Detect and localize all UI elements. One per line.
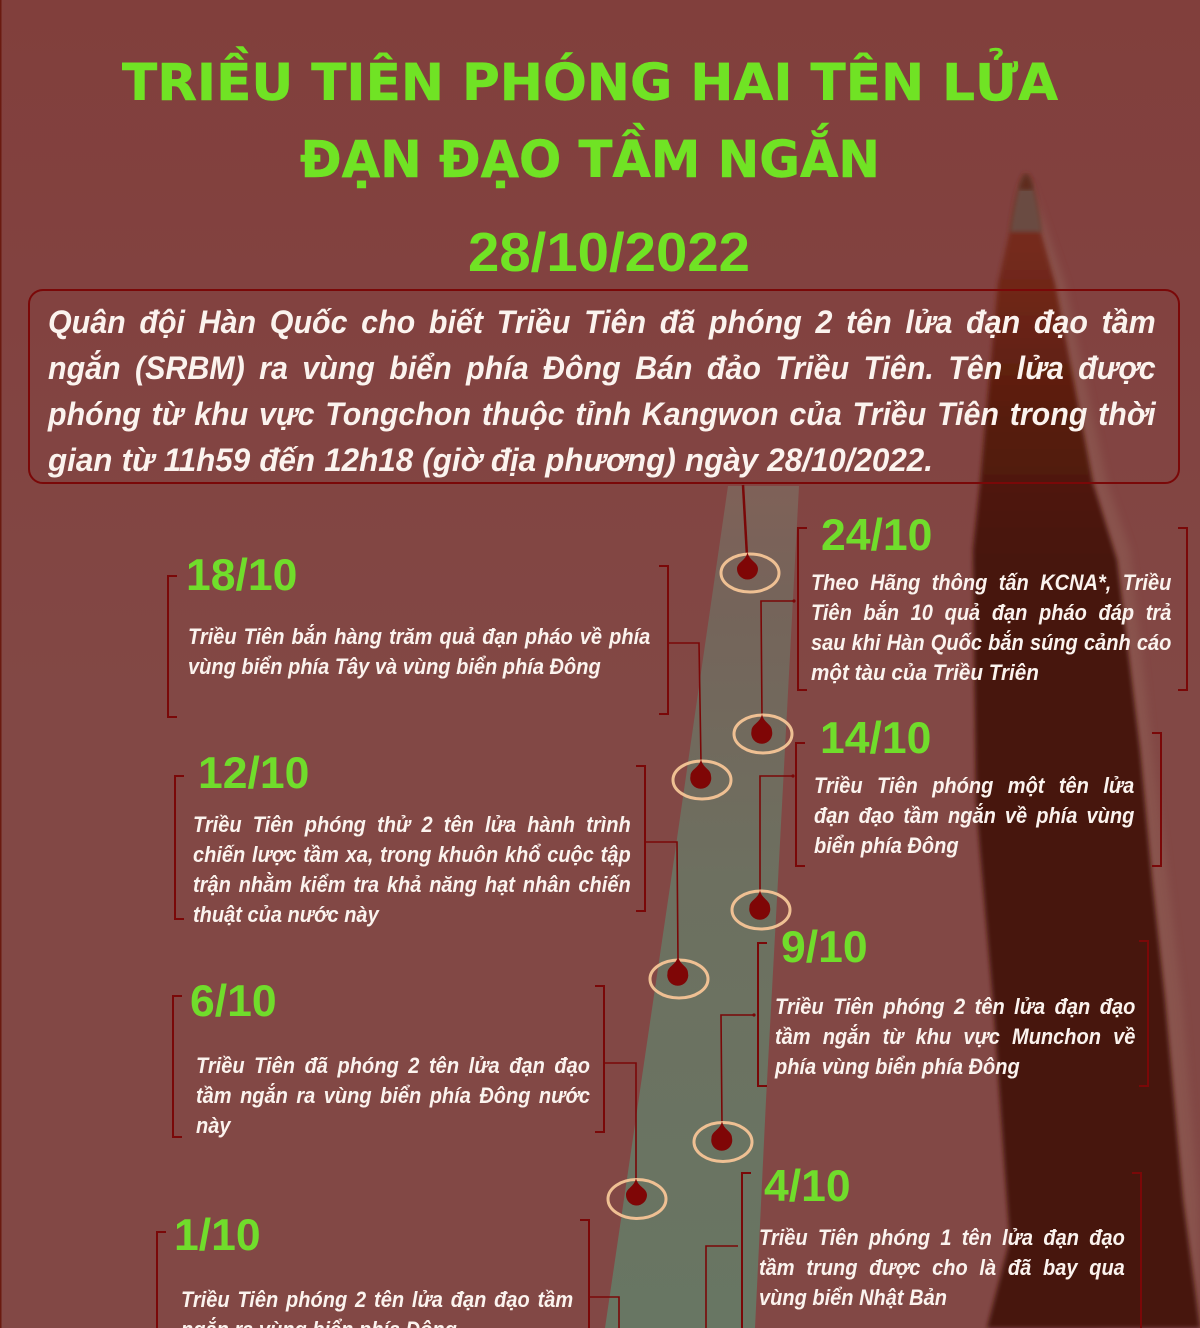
title (122, 45, 1059, 280)
bracket left (741, 1172, 751, 1328)
description: sau khi Hàn Quốc bắn súng cảnh cáo (811, 630, 1171, 655)
bracket right (1132, 1172, 1142, 1328)
description: Triều Tiên bắn hàng trăm quả đạn pháo về phía (188, 624, 650, 649)
marker: 12/10 (646, 842, 708, 998)
event: 14/10 (795, 714, 1162, 867)
bracket left (757, 942, 767, 1087)
description: Triều Tiên phóng 1 tên lửa đạn đạo (759, 1225, 1125, 1250)
description (759, 1225, 1125, 1310)
left edge (0, 0, 2, 1328)
description (814, 773, 1134, 858)
date: 6/10 (190, 977, 277, 1026)
description: tầm ngắn từ khu vực Munchon về (775, 1024, 1135, 1049)
bracket left (797, 527, 807, 691)
bracket right (580, 1219, 590, 1328)
description (188, 624, 650, 679)
bracket left (156, 1231, 166, 1328)
event: 18/10 (167, 551, 669, 718)
intro panel: phóng từ khu vực Tongchon thuộc tỉnh Kangwon của Triều Tiên trong thời (48, 396, 1156, 432)
description (811, 570, 1171, 685)
description: này (196, 1113, 231, 1138)
event: 12/10 (174, 749, 646, 927)
description: vùng biển Nhật Bản (759, 1285, 947, 1310)
description (774, 994, 1135, 1079)
bracket left (167, 575, 177, 718)
description (181, 1287, 573, 1328)
date: 18/10 (186, 551, 297, 600)
description: biển phía Đông (814, 833, 959, 858)
event: 9/10 (757, 923, 1149, 1087)
description: Triều Tiên phóng 2 tên lửa đạn đạo (775, 994, 1135, 1019)
description: Triều Tiên phóng 2 tên lửa đạn đạo tầm (181, 1287, 573, 1312)
intro panel (28, 289, 1180, 484)
marker: 28/10 (721, 485, 779, 592)
description: thuật của nước này (193, 902, 379, 927)
description: Theo Hãng thông tấn KCNA*, Triều (811, 570, 1171, 595)
connector: 1/10 (589, 1297, 619, 1328)
event: 6/10 (172, 977, 605, 1138)
date: 14/10 (820, 714, 931, 763)
description: một tàu của Triều Triên (811, 660, 1039, 685)
intro panel: gian từ 11h59 đến 12h18 (giờ địa phương) ngày 28/10/2022. (48, 442, 933, 478)
description: tầm trung được cho là đã bay qua (759, 1255, 1125, 1280)
date: 12/10 (198, 749, 309, 798)
description: chiến lược tầm xa, trong khuôn khổ cuộc tập (193, 842, 631, 867)
title line 2: ĐẠN ĐẠO TẦM NGẮN (300, 122, 880, 190)
date: 9/10 (781, 923, 868, 972)
marker: 14/10 (732, 774, 795, 929)
description: trận nhằm kiểm tra khả năng hạt nhân chiến (193, 872, 631, 897)
event: 24/10 (797, 511, 1188, 691)
marker: 9/10 (694, 1013, 756, 1162)
description (196, 1053, 590, 1138)
title line 1: TRIỀU TIÊN PHÓNG HAI TÊN LỬA (122, 45, 1059, 113)
bracket right (595, 985, 605, 1133)
bracket left (172, 995, 182, 1138)
date: 1/10 (174, 1211, 261, 1260)
light beam (605, 486, 799, 1328)
date: 4/10 (764, 1162, 851, 1211)
description: Triều Tiên đã phóng 2 tên lửa đạn đạo (196, 1053, 590, 1078)
description: đạn đạo tầm ngắn về phía vùng (814, 803, 1134, 828)
connector: 4/10 (706, 1246, 738, 1328)
intro panel: Quân đội Hàn Quốc cho biết Triều Tiên đã phóng 2 tên lửa đạn đạo tầm (48, 304, 1156, 340)
description: Triều Tiên phóng một tên lửa (814, 773, 1134, 798)
description (193, 812, 631, 927)
bracket right (1139, 940, 1149, 1087)
bracket right (659, 565, 669, 715)
bracket right (636, 765, 646, 912)
intro panel: ngắn (SRBM) ra vùng biển phía Đông Bán đảo Triều Tiên. Tên lửa được (48, 350, 1156, 386)
description: Tiên bắn 10 quả đạn pháo đáp trả (811, 600, 1171, 625)
event: 4/10 (741, 1162, 1142, 1328)
bracket left (174, 775, 184, 920)
bracket right (1152, 732, 1162, 867)
bracket right (1178, 527, 1188, 691)
marker: 6/10 (605, 1063, 666, 1218)
marker: 18/10 (669, 643, 731, 799)
date: 24/10 (821, 511, 932, 560)
description: phía vùng biển phía Đông (775, 1054, 1020, 1079)
description: vùng biển phía Tây và vùng biển phía Đông (188, 654, 601, 679)
marker: 24/10 (734, 599, 796, 753)
event: 1/10 (156, 1211, 590, 1328)
description: Triều Tiên phóng thử 2 tên lửa hành trình (193, 812, 631, 837)
rocket silhouette (973, 173, 1200, 1328)
description: tầm ngắn ra vùng biển phía Đông nước (196, 1083, 590, 1108)
bracket left (795, 742, 805, 867)
